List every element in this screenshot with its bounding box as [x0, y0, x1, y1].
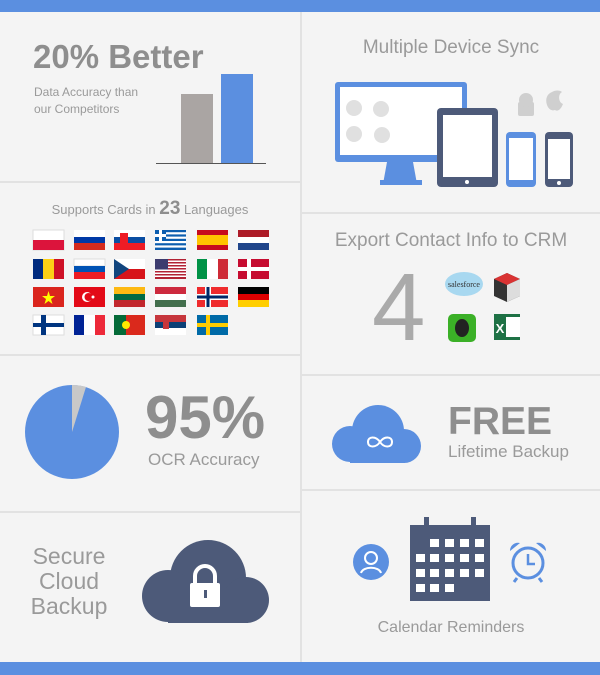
icon: cloud lock	[142, 540, 269, 623]
heading: FREE	[448, 400, 552, 443]
heading: 20% Better	[33, 38, 204, 75]
panel: free backup	[332, 400, 569, 463]
panel: secure cloud	[31, 540, 269, 623]
pie chart	[25, 385, 119, 479]
text: Data Accuracy than	[34, 85, 138, 99]
panel: calendar	[353, 517, 546, 636]
text: Lifetime Backup	[448, 442, 569, 461]
text: Cloud	[39, 568, 99, 594]
text: our Competitors	[34, 102, 119, 116]
icon: calendar	[410, 517, 490, 601]
text	[34, 85, 138, 116]
icon: alarm clock	[510, 542, 546, 583]
panel: device sync	[335, 37, 573, 187]
panel: languages	[32, 198, 269, 336]
icon: cloud	[332, 405, 421, 463]
stat: 95%	[145, 384, 265, 451]
heading: Supports Cards in 23 Languages	[52, 198, 248, 219]
icon: person	[353, 544, 389, 580]
label: OCR Accuracy	[148, 450, 259, 469]
panel: OCR	[25, 384, 265, 479]
text	[31, 543, 107, 619]
icon: devices	[335, 82, 573, 187]
text: Secure	[33, 543, 105, 569]
heading: Multiple Device Sync	[363, 37, 539, 58]
panel: CRM	[335, 230, 567, 361]
text: Backup	[31, 593, 107, 619]
icons: CRM apps: X	[496, 321, 505, 336]
bottom bar	[0, 662, 600, 675]
number: 4	[372, 254, 425, 361]
bar chart	[156, 74, 266, 164]
flags	[32, 230, 269, 336]
heading: Export Contact Info to CRM	[335, 230, 567, 251]
panel: accuracy	[33, 38, 266, 164]
top bar	[0, 0, 600, 12]
icons: CRM apps	[445, 272, 520, 342]
label: Calendar Reminders	[378, 619, 524, 636]
icons: CRM apps: salesforce	[448, 280, 480, 289]
